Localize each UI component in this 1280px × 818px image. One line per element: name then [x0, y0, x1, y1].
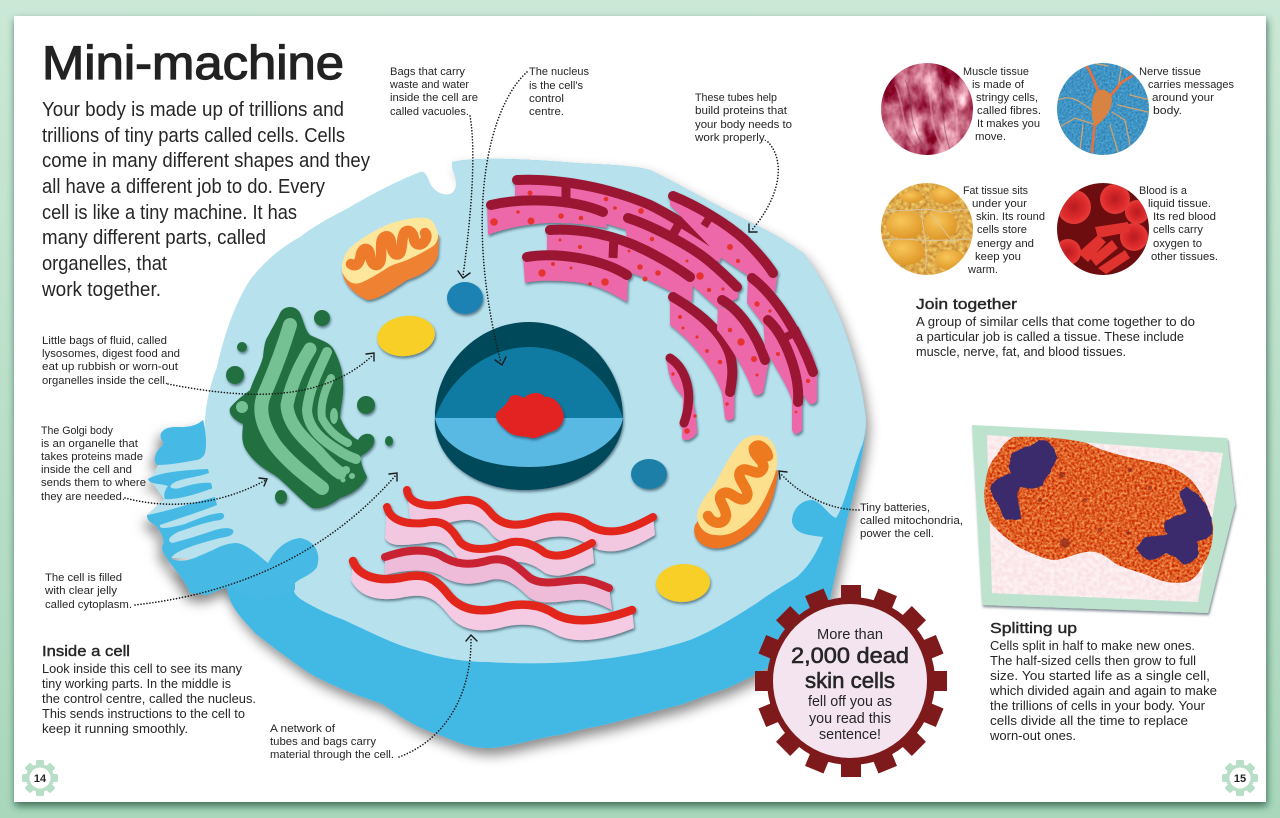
golgi dots [226, 310, 393, 504]
label: blood [1139, 185, 1218, 263]
gear callout [755, 585, 947, 777]
page number 14: 14 [34, 773, 47, 785]
label: network: material through the cell. [270, 749, 394, 761]
label: golgi body [41, 425, 146, 503]
band [763, 320, 802, 434]
label: muscle tissue [963, 66, 1041, 143]
label: muscle tissue: Muscle tissue [963, 66, 1029, 78]
label: golgi body: takes proteins made [41, 451, 143, 463]
band [625, 218, 738, 308]
photo speckle [985, 433, 1225, 605]
label: vacuoles [389, 66, 478, 118]
page number 15 [1222, 760, 1258, 796]
text block: inside a cell: keep it running smoothly. [42, 722, 188, 736]
label: vacuoles: inside the cell are [390, 92, 478, 104]
golgi stripes [236, 325, 356, 488]
label: mitochondria: Tiny batteries, [860, 502, 930, 514]
label: cytoplasm: called cytoplasm. [45, 599, 132, 611]
tissue photo: blood [1055, 183, 1149, 275]
intro text: many different parts, called [42, 227, 266, 249]
dividing cell body [980, 433, 1218, 588]
label: lysosomes: Little bags of fluid, called [42, 335, 167, 347]
label: mitochondria: power the cell. [860, 528, 934, 540]
label: golgi body: The Golgi body [41, 425, 113, 437]
lysosomes [374, 312, 711, 604]
label: network [270, 723, 394, 761]
text block: splitting up: Cells split in half to make new ones. [990, 639, 1195, 653]
label: muscle tissue: stringy cells, [976, 92, 1038, 104]
wave b [385, 507, 594, 576]
cell diagram [147, 159, 866, 748]
text block: splitting up [989, 620, 1217, 743]
rough endoplasmic reticulum [487, 178, 817, 440]
label: nerve tissue: body. [1153, 105, 1182, 117]
band [670, 295, 735, 420]
text block: splitting up: the trillions of cells in your body. Your [990, 699, 1205, 713]
text block: inside a cell: the control centre, called the nucleus. [42, 692, 256, 706]
photo: dividing cell [972, 425, 1235, 613]
photo frame [972, 425, 1235, 613]
gear text: skin cells [805, 668, 895, 693]
intro text [41, 99, 370, 301]
label: nerve tissue [1139, 66, 1234, 117]
golgi base [230, 307, 374, 508]
membrane folds [147, 420, 318, 600]
lower mitochondrion [694, 435, 778, 548]
arrow: nucleus [482, 72, 527, 365]
cell membrane [226, 159, 866, 748]
chromosomes [990, 440, 1213, 564]
label: nucleus: centre. [529, 106, 564, 118]
gear text [791, 626, 909, 743]
label: nucleus: is the cell's [529, 80, 584, 92]
wave d [351, 561, 634, 640]
text block: splitting up: cells divide all the time to replace [990, 714, 1188, 728]
text block: join together: a particular job is called a tissue. These include [916, 330, 1184, 344]
text block: join together: muscle, nerve, fat, and blood tissues. [916, 345, 1126, 359]
intro text: work together. [41, 279, 161, 301]
text block: splitting up: The half-sized cells then grow to full [990, 654, 1196, 668]
label: fat tissue: energy and [977, 238, 1034, 250]
text block: inside a cell: This sends instructions to the cell to [42, 707, 245, 721]
page number 14 [22, 760, 58, 796]
label: golgi body: is an organelle that [41, 438, 138, 450]
page number 15: 15 [1234, 773, 1246, 785]
arrow: golgi [125, 478, 267, 504]
wave c [385, 551, 612, 610]
text block: join together [916, 296, 1195, 359]
intro text: cell is like a tiny machine. It has [42, 202, 297, 224]
arrow: network [399, 635, 477, 757]
label: vacuoles: waste and water [389, 79, 469, 91]
label: muscle tissue: It makes you [977, 118, 1040, 130]
label: nerve tissue: carries messages [1148, 79, 1234, 91]
tissue photo: muscle [881, 63, 973, 155]
label: blood: cells carry [1153, 224, 1203, 236]
label: blood: oxygen to [1153, 238, 1202, 250]
label: nerve tissue: Nerve tissue [1139, 66, 1201, 78]
intro text: all have a different job to do. Every [42, 176, 325, 198]
text block: join together: A group of similar cells that come together to do [916, 315, 1195, 329]
title: Mini-machine [42, 36, 344, 89]
label: nucleus [529, 66, 589, 118]
label: tubes: work properly. [694, 132, 767, 144]
label: cytoplasm: with clear jelly [44, 585, 118, 597]
gear text: sentence! [819, 726, 881, 743]
text block: inside a cell: tiny working parts. In the middle is [42, 677, 231, 691]
band [670, 196, 777, 292]
text block: join together: Join together [916, 296, 1017, 313]
arrow: tubes [749, 142, 778, 232]
label: fat tissue: cells store [977, 224, 1027, 236]
label: network: A network of [270, 723, 336, 735]
nucleolus [496, 393, 564, 438]
band [487, 198, 607, 235]
label: lysosomes: eat up rubbish or worn-out [42, 361, 178, 373]
label: cytoplasm: The cell is filled [45, 572, 122, 584]
text block: inside a cell [42, 643, 256, 736]
text block: splitting up: size. You started life as a single cell, [990, 669, 1210, 683]
label: nerve tissue: around your [1152, 92, 1214, 104]
label: golgi body: sends them to where [41, 477, 146, 489]
band [523, 254, 628, 302]
arrow: lysosomes [168, 353, 374, 394]
gear text: 2,000 dead [791, 643, 909, 668]
nucleus [435, 322, 623, 490]
upper mitochondrion [342, 218, 439, 300]
label: fat tissue: keep you [975, 251, 1021, 263]
intro text: trillions of tiny parts called cells. Cells [42, 125, 345, 147]
dotted arrows [125, 72, 859, 757]
label: blood: liquid tissue. [1148, 198, 1211, 210]
label: tubes [694, 92, 792, 144]
label: lysosomes: organelles inside the cell. [42, 375, 168, 387]
golgi body [226, 307, 393, 508]
gear text: More than [817, 626, 883, 643]
label: cytoplasm [44, 572, 132, 611]
smooth endoplasmic reticulum [351, 490, 655, 640]
label: vacuoles: called vacuoles. [390, 106, 469, 118]
label: golgi body: they are needed. [41, 491, 125, 503]
label: nucleus: control [529, 93, 564, 105]
label: lysosomes: lysosomes, digest food and [42, 348, 180, 360]
label: blood: Its red blood [1153, 211, 1216, 223]
gear text: you read this [809, 710, 891, 727]
label: tubes: build proteins that [695, 105, 787, 117]
gear text: fell off you as [808, 693, 892, 710]
vacuoles [447, 282, 667, 489]
label: nucleus: The nucleus [529, 66, 589, 78]
wave a [407, 490, 655, 551]
label: golgi body: inside the cell and [41, 464, 132, 476]
label: fat tissue [963, 185, 1045, 276]
label: blood: other tissues. [1151, 251, 1218, 263]
label: vacuoles: Bags that carry [390, 66, 465, 78]
arrow: vacuoles [458, 116, 473, 278]
band [747, 278, 817, 404]
text block: splitting up: Splitting up [990, 620, 1077, 637]
label: tubes: your body needs to [695, 119, 792, 131]
arrow: cytoplasm [135, 473, 397, 605]
label: muscle tissue: move. [975, 131, 1006, 143]
intro text: come in many different shapes and they [42, 150, 370, 172]
text block: splitting up: which divided again and again to make [989, 684, 1217, 698]
ribosomes [490, 190, 810, 434]
text block: inside a cell: Inside a cell [42, 643, 130, 660]
label: muscle tissue: is made of [972, 79, 1025, 91]
membrane shadow [147, 420, 318, 600]
label: mitochondria [860, 502, 963, 540]
band [667, 358, 697, 440]
cytoplasm [147, 159, 866, 663]
band [547, 229, 693, 302]
label: fat tissue: under your [972, 198, 1027, 210]
intro text: organelles, that [42, 253, 167, 275]
gear [755, 585, 947, 777]
tissue photo: fat [880, 183, 975, 275]
label: fat tissue: warm. [967, 264, 998, 276]
label: lysosomes [42, 335, 180, 387]
label: fat tissue: Fat tissue sits [963, 185, 1028, 197]
band [717, 300, 769, 395]
text block: splitting up: worn-out ones. [989, 729, 1076, 743]
text block: inside a cell: Look inside this cell to see its many [42, 662, 243, 676]
label: tubes: These tubes help [695, 92, 777, 104]
tissue photo: nerve [1057, 63, 1150, 155]
label: network: tubes and bags carry [270, 736, 377, 748]
arrow: mitochondria [779, 471, 859, 510]
label: muscle tissue: called fibres. [977, 105, 1041, 117]
label: mitochondria: called mitochondria, [860, 515, 963, 527]
label: blood: Blood is a [1139, 185, 1188, 197]
intro text: Your body is made up of trillions and [42, 99, 344, 121]
label: fat tissue: skin. Its round [976, 211, 1045, 223]
band [515, 178, 722, 262]
